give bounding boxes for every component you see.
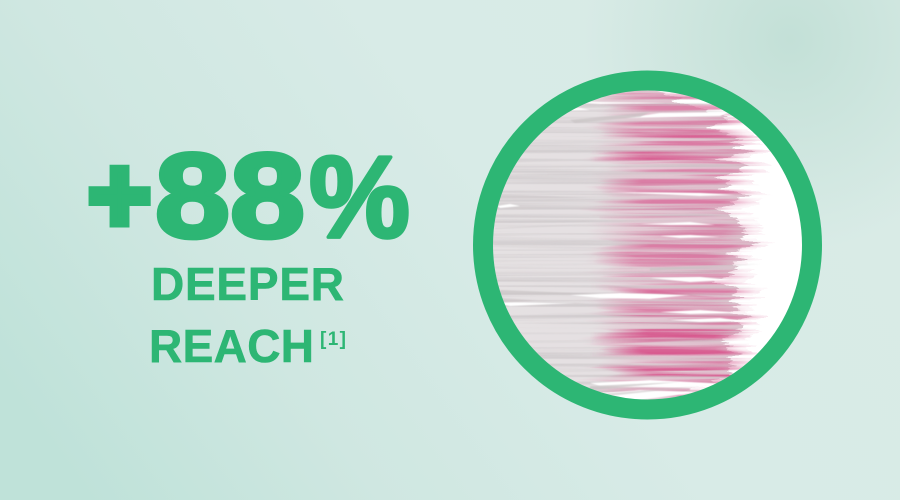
fine grey hairs <box>493 96 748 392</box>
headline: +88%: + <box>88 134 151 255</box>
label: reach with reference: REACH <box>149 320 314 372</box>
green ring <box>483 80 812 410</box>
white gaps <box>495 100 745 400</box>
circular bristle illustration <box>470 80 812 410</box>
label: reach with reference: [1] <box>320 329 346 350</box>
label: deeper: DEEPER <box>151 258 344 310</box>
grey bristle strands <box>495 112 760 397</box>
headline: +88%: % <box>309 132 410 262</box>
bristle tuft <box>470 80 760 410</box>
headline: +88%: 88 <box>155 129 305 263</box>
dark pink core streaks <box>594 150 720 356</box>
headline: +88% <box>88 129 410 263</box>
fine pink hairs <box>590 90 755 400</box>
